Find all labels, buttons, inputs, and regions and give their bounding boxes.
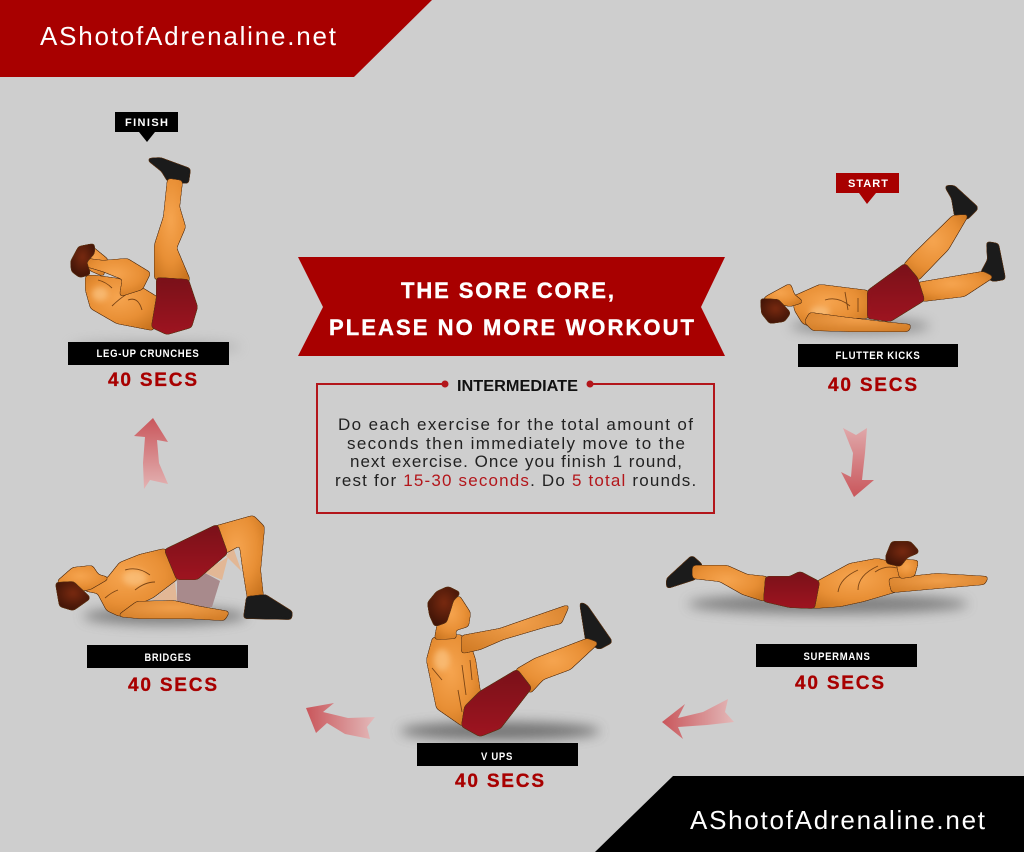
label bar: leg-up crunches	[68, 342, 229, 365]
exercise: supermans	[667, 542, 988, 694]
label bar: supermans	[756, 644, 917, 667]
exercise: flutter kicks: 40 SECS	[828, 375, 917, 396]
instructions panel	[317, 378, 714, 513]
footer banner: AShotofAdrenaline.net	[690, 805, 986, 835]
start tag: START	[848, 178, 888, 190]
exercise: v ups: 40 SECS	[455, 771, 544, 792]
arrow: flutter kicks to supermans	[841, 428, 874, 497]
arrow: supermans to v ups	[662, 699, 734, 739]
label bar: flutter kicks	[798, 344, 958, 367]
arrow: bridges to leg-up crunches	[134, 418, 168, 489]
exercise: flutter kicks	[761, 186, 1005, 396]
label bar: v ups	[417, 743, 578, 766]
header banner: AShotofAdrenaline.net	[40, 21, 337, 51]
exercise: leg-up crunches	[68, 158, 240, 391]
title ribbon	[298, 257, 725, 356]
instructions panel: next exercise. Once you finish 1 round,	[350, 452, 682, 471]
instructions panel: INTERMEDIATE	[457, 378, 578, 395]
exercise: bridges	[56, 516, 292, 696]
exercise: supermans: 40 SECS	[795, 673, 884, 694]
arrow: v ups to bridges	[306, 703, 375, 739]
instructions panel: Do each exercise for the total amount of	[338, 415, 693, 434]
finish tag: FINISH	[125, 117, 168, 129]
label bar: leg-up crunches: LEG-UP CRUNCHES	[96, 348, 200, 360]
label bar: bridges: BRIDGES	[144, 652, 192, 664]
title ribbon: PLEASE NO MORE WORKOUT	[329, 315, 695, 340]
exercise: leg-up crunches: 40 SECS	[108, 370, 197, 391]
label bar: supermans: SUPERMANS	[804, 651, 870, 663]
title ribbon: THE SORE CORE,	[401, 278, 614, 303]
label bar: flutter kicks: FLUTTER KICKS	[836, 350, 920, 362]
footer banner	[595, 776, 1024, 852]
label bar: v ups: V UPS	[481, 751, 513, 763]
header banner	[0, 0, 432, 77]
finish tag	[115, 112, 178, 142]
label bar: bridges	[87, 645, 248, 668]
exercise: v ups	[400, 587, 612, 792]
instructions panel: seconds then immediately move to the	[347, 434, 685, 453]
start tag	[836, 173, 899, 204]
exercise: bridges: 40 SECS	[128, 675, 217, 696]
instructions panel: rest for 15-30 seconds. Do 5 total rounds.	[335, 471, 697, 490]
